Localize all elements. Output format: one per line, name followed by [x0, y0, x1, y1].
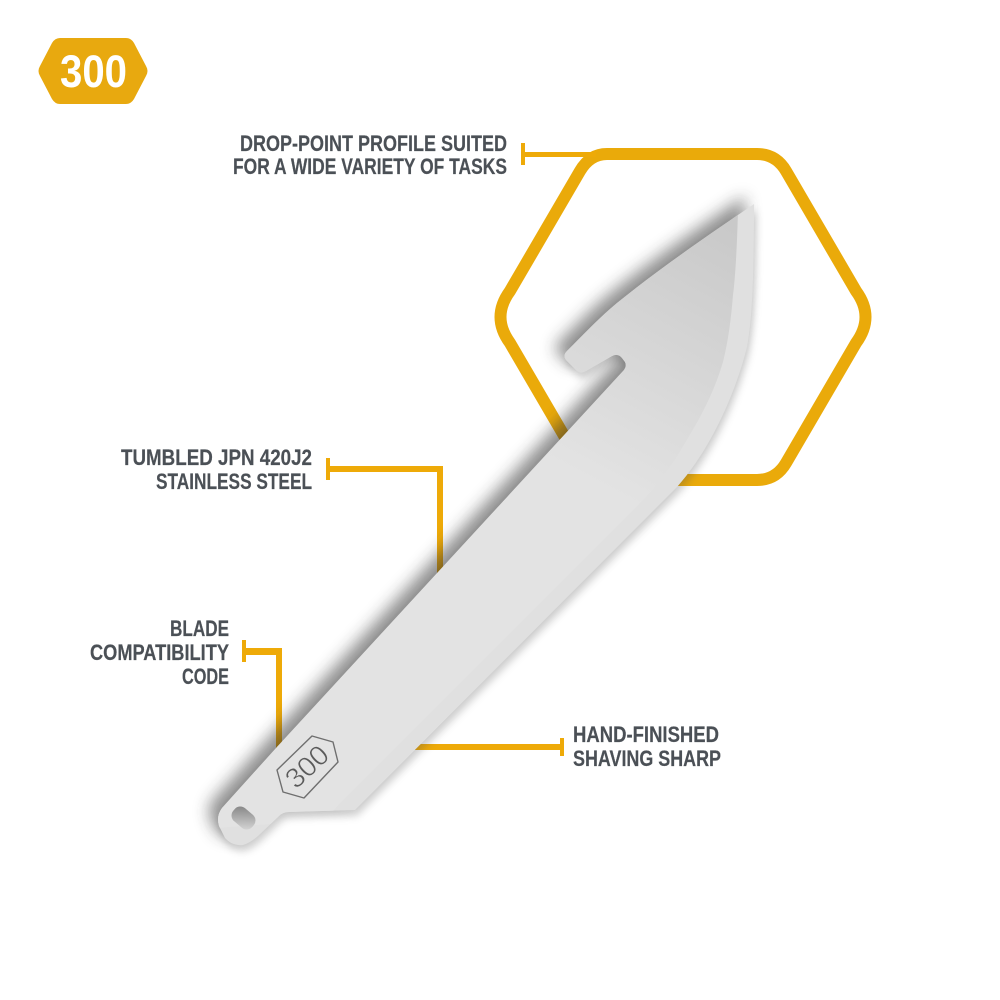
- label: hand-finished: [573, 722, 721, 771]
- label: drop-point profile: FOR A WIDE VARIETY OF TASKS: [233, 154, 507, 179]
- blade flat face: [190, 210, 738, 830]
- label: steel: STAINLESS STEEL: [156, 469, 312, 494]
- label: compatibility code: BLADE: [170, 616, 229, 641]
- label: compatibility code: [90, 616, 229, 689]
- badge: 300: 300: [60, 46, 127, 97]
- large hexagon outline: [500, 154, 866, 480]
- label: hand-finished: HAND-FINISHED: [573, 722, 719, 747]
- engraved code mark: 300: [279, 739, 335, 794]
- lanyard hole: [228, 803, 259, 833]
- label: compatibility code: CODE: [182, 664, 229, 689]
- connector: steel: [326, 458, 443, 578]
- blade body and bevel: [218, 204, 754, 845]
- label: drop-point profile: [233, 131, 507, 179]
- label: compatibility code: COMPATIBILITY: [90, 640, 229, 665]
- label: steel: TUMBLED JPN 420J2: [121, 445, 312, 470]
- label: steel: [121, 445, 312, 494]
- connector: drop-point profile: [521, 143, 596, 165]
- label: hand-finished: SHAVING SHARP: [573, 746, 721, 771]
- blade shadow: upper-left: [209, 196, 745, 837]
- blade shadow: lower-right: [220, 210, 756, 851]
- connector: compatibility code: [242, 640, 282, 750]
- connector: hand-finished: [415, 738, 564, 756]
- badge: 300: [38, 38, 148, 104]
- label: drop-point profile: DROP-POINT PROFILE SUITED: [240, 131, 507, 156]
- blade: [190, 196, 756, 851]
